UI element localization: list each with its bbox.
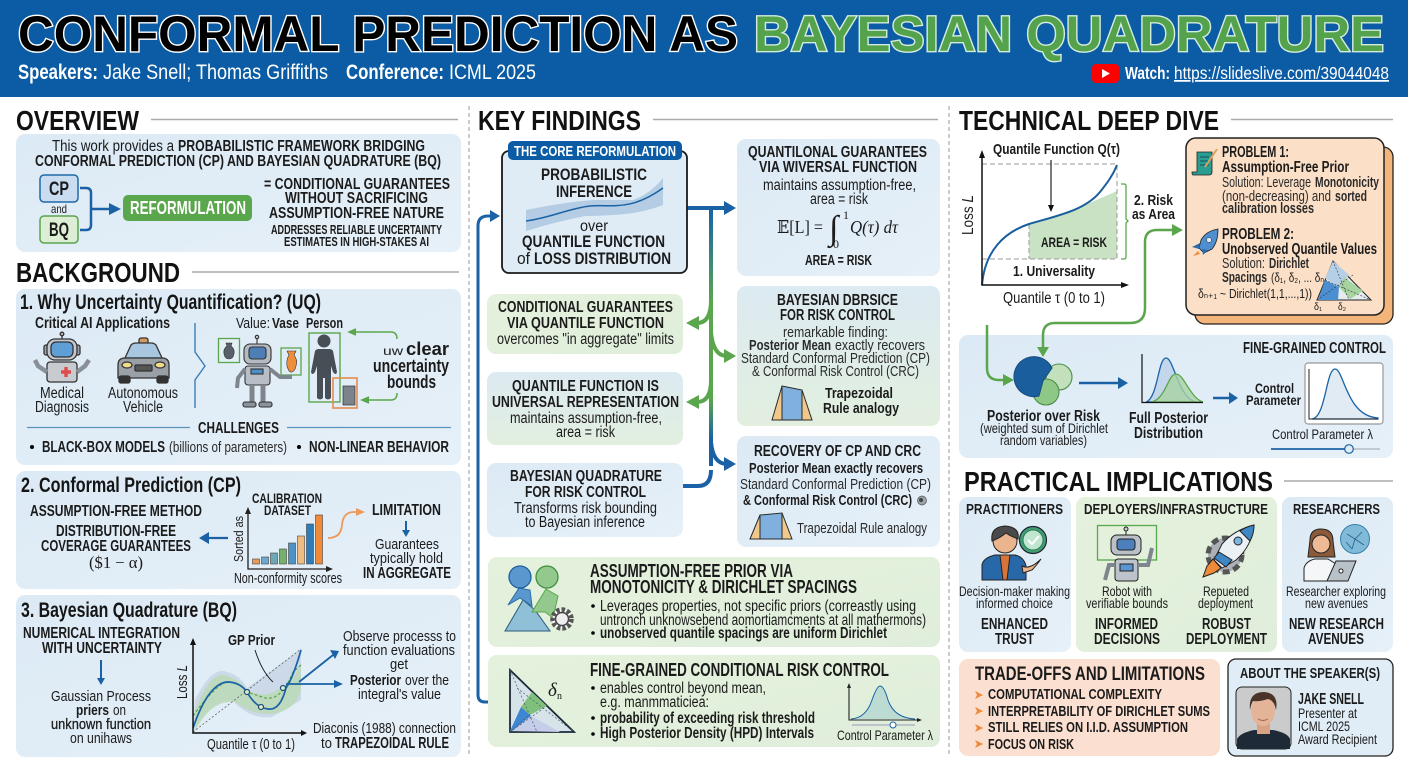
probabilistic inference text: PROBABILISTIC xyxy=(541,165,647,184)
card description: Posterior Mean xyxy=(749,338,831,354)
posterior over risk label: (weighted sum of Dirichlet xyxy=(980,420,1108,436)
card: researchers xyxy=(1282,497,1393,652)
card: bayesian quadrature for risk control: to Bayesian inference xyxy=(525,514,645,531)
application labels: Vehicle xyxy=(123,399,163,416)
arrow: to control parameter xyxy=(1213,392,1238,404)
problem 2 text: Spacings xyxy=(1222,270,1267,286)
card bullets xyxy=(591,598,926,642)
formula: expected loss integral: Q(τ) dτ xyxy=(850,217,899,238)
deployer captions: verifiable bounds xyxy=(1086,595,1168,611)
GP prior chart: Quantile τ (0 to 1) xyxy=(207,737,295,753)
problem 2 text xyxy=(1198,226,1377,301)
deployer captions: ROBUST xyxy=(1202,616,1251,633)
icon: detection robot scene xyxy=(218,333,357,408)
panel: conformal prediction xyxy=(16,471,461,589)
card: bayesian dbrsice xyxy=(737,286,940,426)
icon: dirichlet triangle xyxy=(510,670,574,732)
card: researchers: new avenues xyxy=(1305,595,1368,611)
overview intro text: This work provides a xyxy=(52,138,174,155)
coverage guarantees text: COVERAGE GUARANTEES xyxy=(41,538,191,555)
limitations list xyxy=(975,687,1210,753)
card heading xyxy=(748,144,927,176)
icon: posterior over risk pie xyxy=(1014,357,1072,405)
card heading: MONOTONICITY & DIRICHLET SPACINGS xyxy=(590,577,857,597)
card description xyxy=(740,460,931,509)
BQ box xyxy=(40,216,78,243)
full posterior label xyxy=(1129,410,1208,442)
card description: area = risk xyxy=(810,191,868,208)
result statement: ASSUMPTION-FREE NATURE xyxy=(269,205,444,222)
BQ box: BQ xyxy=(49,220,69,241)
numerical integration text: on unihaws xyxy=(70,730,132,747)
panel: about the speaker xyxy=(1228,659,1393,756)
card: conditional guarantees: VIA QUANTILE FUNCTION xyxy=(507,315,664,332)
speaker details: Presenter at xyxy=(1298,705,1357,721)
icon: robot with bounds xyxy=(1098,526,1156,581)
card description: exactly recovers xyxy=(835,338,925,354)
coverage guarantees text xyxy=(30,503,202,572)
chart: quantile function: AREA = RISK xyxy=(1041,234,1107,250)
trapezoidal rule label xyxy=(823,385,900,417)
card: recovery of CP and CRC xyxy=(737,436,940,547)
card bullets: untronch unknowsebend aomortiamcments at all mathermons) xyxy=(600,612,926,629)
speaker details: Award Recipient xyxy=(1298,731,1377,747)
formula: expected loss integral: 1 xyxy=(843,208,849,222)
numerical integration text: NUMERICAL INTEGRATION xyxy=(23,625,180,642)
icon: decision maker xyxy=(982,526,1046,580)
card description xyxy=(741,325,930,380)
problem 1 text xyxy=(1222,144,1379,217)
observation and posterior text: Diaconis (1988) connection xyxy=(313,720,456,737)
problem 1 text: sorted xyxy=(1335,189,1367,205)
limitations list: INTERPRETABILITY OF DIRICHLET SUMS xyxy=(988,704,1210,720)
challenges list: (billions of parameters) xyxy=(169,440,287,456)
probabilistic inference text xyxy=(541,165,647,201)
card: conditional guarantees: CONDITIONAL GUARANTEES xyxy=(498,299,673,316)
card: bayesian quadrature for risk control xyxy=(487,463,683,537)
header banner xyxy=(0,0,1408,97)
full posterior label: Full Posterior xyxy=(1129,410,1208,427)
and label: and xyxy=(51,202,67,216)
watch link: Watch: xyxy=(1125,63,1170,83)
calibration dataset chart xyxy=(231,490,342,587)
clear uncertainty bounds label: uw xyxy=(383,344,403,358)
speaker details: JAKE SNELL xyxy=(1298,691,1364,708)
calibration dataset chart: Sorted as xyxy=(231,516,246,562)
card: bayesian quadrature for risk control: BAYESIAN QUADRATURE xyxy=(510,468,662,485)
full posterior label: Distribution xyxy=(1134,425,1203,442)
chart: full posterior distribution xyxy=(1142,354,1203,402)
icon: dirichlet simplex: δ₁ xyxy=(1314,302,1323,313)
panel: trade-offs and limitations: TRADE-OFFS AND LIMITATIONS xyxy=(975,664,1205,685)
card: universal representation: area = risk xyxy=(556,424,615,441)
challenges list: BLACK-BOX MODELS xyxy=(42,439,165,456)
GP prior chart: Loss L xyxy=(175,665,191,699)
deployer captions: deployment xyxy=(1198,595,1253,611)
panel: why uncertainty quantification xyxy=(16,289,461,465)
card heading: FOR RISK CONTROL xyxy=(780,307,895,324)
deployer captions: Repueted xyxy=(1203,583,1249,599)
icon: scroll and quill xyxy=(1192,149,1217,175)
card description: & Conformal Risk Control (CRC) xyxy=(752,364,919,380)
card: practitioners: Decision-maker making xyxy=(959,583,1070,599)
result statement: WITHOUT SACRIFICING xyxy=(285,190,428,207)
observation and posterior text: over the xyxy=(405,672,449,689)
reformulation pill: REFORMULATION xyxy=(130,198,246,218)
numerical integration text: priers xyxy=(76,702,109,719)
panel heading: 1. Why Uncertainty Quantification? (UQ) xyxy=(20,291,321,314)
icon: dirichlet simplex: δ₂ xyxy=(1338,302,1346,313)
heading: practical implications: PRACTICAL IMPLICATIONS xyxy=(964,466,1273,497)
icon: rocket and gear xyxy=(1203,525,1254,577)
title xyxy=(18,6,1384,62)
card: deployers and infrastructure xyxy=(1076,497,1277,652)
icon: video play button xyxy=(1092,64,1119,83)
card description: maintains assumption-free, xyxy=(763,177,916,194)
reformulation pill xyxy=(123,195,252,221)
card heading xyxy=(590,561,857,597)
challenges list: NON-LINEAR BEHAVIOR xyxy=(309,439,449,456)
heading: key findings: KEY FINDINGS xyxy=(478,105,641,136)
problem 2 text: PROBLEM 2: xyxy=(1222,226,1294,243)
panel: overview xyxy=(16,134,461,252)
card bullets xyxy=(591,680,815,742)
clear uncertainty bounds label: bounds xyxy=(387,372,436,392)
formula: expected loss integral: 𝔼[L] = xyxy=(777,217,823,237)
chart: quantile function: Quantile Function Q(τ) xyxy=(993,141,1120,158)
quantile function text: over xyxy=(580,218,608,235)
area equals risk: AREA = RISK xyxy=(805,253,872,269)
control slider: Control Parameter λ xyxy=(1272,426,1373,442)
CP box: CP xyxy=(49,179,69,200)
icon: dirichlet triangle: n xyxy=(557,691,562,702)
value labels xyxy=(236,316,343,332)
formula: expected loss integral xyxy=(777,208,899,251)
card bullets: Leverages properties, not specific priors (correastly using xyxy=(600,598,916,615)
arrow: to coverage guarantees xyxy=(199,532,228,544)
result statement xyxy=(264,176,450,249)
speaker portrait xyxy=(1236,687,1291,749)
arrows: uncertainty bounds xyxy=(349,329,397,403)
application labels xyxy=(35,385,178,416)
card: practitioners: informed choice xyxy=(976,595,1053,611)
card description: remarkable finding: xyxy=(783,325,888,341)
trapezoidal rule label: Rule analogy xyxy=(823,400,900,417)
posterior over risk label: Posterior over Risk xyxy=(987,408,1100,425)
arrows: central flow network xyxy=(683,201,736,486)
arrows: to observations and posterior xyxy=(286,650,343,688)
card heading: RECOVERY OF CP AND CRC xyxy=(754,443,921,460)
card: quantilonal guarantees xyxy=(737,139,940,276)
overview intro text: PROBABILISTIC FRAMEWORK BRIDGING xyxy=(178,138,425,155)
numerical integration text: on xyxy=(113,702,126,719)
card: conditional guarantees xyxy=(487,294,683,354)
deployer captions xyxy=(1086,583,1267,648)
card: assumption-free prior xyxy=(488,557,940,647)
arrow: left feedback loop xyxy=(478,210,500,702)
panel heading: 3. Bayesian Quadrature (BQ) xyxy=(21,599,237,622)
value labels: Person xyxy=(306,316,343,332)
numerical integration text: WITH UNCERTAINTY xyxy=(42,640,163,657)
arrow: green link to problems and posterior xyxy=(987,224,1183,386)
panel: posterior flow xyxy=(959,335,1393,458)
card: universal representation xyxy=(487,372,683,445)
chart: quantile function: as Area xyxy=(1132,206,1176,223)
deployer captions: DEPLOYMENT xyxy=(1186,631,1267,648)
card: researchers: RESEARCHERS xyxy=(1293,501,1380,518)
icon: trapezoid xyxy=(750,513,792,539)
value labels: Vase xyxy=(272,316,299,332)
icon: small swirl xyxy=(918,496,926,505)
control parameter label xyxy=(1246,380,1301,408)
card: researchers: AVENUES xyxy=(1308,631,1364,648)
limitations list: STILL RELIES ON I.I.D. ASSUMPTION xyxy=(988,720,1188,736)
card description xyxy=(763,177,916,208)
problem 2 text: (δ₁, δ₂, ... δₙ, xyxy=(1271,270,1327,285)
numerical integration text: unknown function xyxy=(51,716,151,733)
clear uncertainty bounds label: uncertainty xyxy=(373,356,449,376)
chart: quantile function: 1. Universality xyxy=(1013,263,1096,280)
posterior over risk label xyxy=(980,408,1108,448)
card: bayesian quadrature for risk control: FOR RISK CONTROL xyxy=(525,484,646,501)
problem 1 text: Solution: Leverage xyxy=(1222,175,1311,191)
value labels: Value: xyxy=(236,316,270,332)
result statement: ADDRESSES RELIABLE UNCERTAINTY xyxy=(271,222,442,237)
challenges heading: CHALLENGES xyxy=(198,420,279,437)
speakers and conference: Conference: xyxy=(346,61,444,84)
deployer captions: INFORMED xyxy=(1095,616,1158,633)
panel: bayesian quadrature xyxy=(16,595,461,757)
observation and posterior text: Posterior xyxy=(350,672,401,689)
posterior over risk label: random variables) xyxy=(1000,432,1087,448)
icon: trapezoid xyxy=(772,386,812,420)
card: practitioners xyxy=(959,497,1071,652)
calibration dataset chart: DATASET xyxy=(264,502,311,518)
speaker details: ICML 2025 xyxy=(1298,718,1350,734)
formula: expected loss integral: 0 xyxy=(833,237,839,251)
icon: dirichlet simplex xyxy=(1314,261,1371,313)
card bullets: e.g. manmmaticiea: xyxy=(600,694,709,711)
card: universal representation: QUANTILE FUNCTION IS xyxy=(512,378,659,395)
card: universal representation: UNIVERSAL REPRESENTATION xyxy=(492,394,679,411)
arrow: merge to reformulation xyxy=(80,188,121,230)
icon: medical robot xyxy=(35,332,89,382)
core reformulation badge: THE CORE REFORMULATION xyxy=(514,143,676,160)
panel: problems xyxy=(1186,138,1393,324)
card description: & Conformal Risk Control (CRC) xyxy=(743,492,912,509)
overview intro text xyxy=(35,138,441,170)
observation and posterior text xyxy=(313,628,456,752)
CP box xyxy=(40,175,78,202)
panel: core reformulation xyxy=(502,141,687,273)
card heading xyxy=(777,292,898,324)
card: conditional guarantees: overcomes "in aggregate" limits xyxy=(497,331,674,348)
icon: autonomous car xyxy=(118,338,169,383)
calibration dataset chart: CALIBRATION xyxy=(252,490,322,506)
panel heading: 2. Conformal Prediction (CP) xyxy=(21,474,241,497)
challenges list xyxy=(30,439,449,456)
card: practitioners: TRUST xyxy=(995,631,1034,648)
card: practitioners: PRACTITIONERS xyxy=(966,501,1063,518)
arrow: to limitation xyxy=(328,508,365,538)
limitation text: Guarantees xyxy=(375,536,439,553)
arrow: to full posterior xyxy=(1079,377,1128,389)
card: bayesian quadrature for risk control: Transforms risk bounding xyxy=(514,500,657,517)
card: deployers and infrastructure: DEPLOYERS/INFRASTRUCTURE xyxy=(1084,501,1268,518)
quantile function text: QUANTILE FUNCTION xyxy=(522,232,665,251)
speakers and conference: Jake Snell; Thomas Griffiths xyxy=(103,61,328,84)
deployer captions: Robot with xyxy=(1102,583,1152,599)
card: fine-grained conditional risk control xyxy=(488,655,940,747)
card heading: VIA WIVERSAL FUNCTION xyxy=(759,159,917,176)
icon: researcher with laptop xyxy=(1304,524,1370,581)
quantile curve band xyxy=(526,178,663,231)
icon: overlapping figures and gear xyxy=(505,566,572,631)
application labels: Autonomous xyxy=(108,385,178,402)
speaker details xyxy=(1298,691,1377,747)
panel: trade-offs and limitations xyxy=(959,659,1220,756)
calibration dataset chart: Non-conformity scores xyxy=(234,571,342,587)
card heading: BAYESIAN DBRSICE xyxy=(777,292,898,309)
trapezoidal rule label: Trapezoidal Rule analogy xyxy=(797,521,928,537)
observation and posterior text: integral's value xyxy=(358,686,441,703)
control parameter mini chart: Control Parameter λ xyxy=(837,727,933,743)
observation and posterior text: to xyxy=(321,735,332,752)
chart: quantile function xyxy=(960,141,1176,307)
card: practitioners: ENHANCED xyxy=(981,616,1048,633)
card bullets: unobserved quantile spacings are uniform Dirichlet xyxy=(600,625,887,642)
application labels: Diagnosis xyxy=(35,399,89,416)
problem 2 text: δₙ₊₁ ~ Dirichlet(1,1,...,1)) xyxy=(1198,286,1312,301)
GP prior chart: GP Prior xyxy=(228,632,275,649)
card: universal representation: maintains assumption-free, xyxy=(510,410,662,427)
speakers and conference: ICML 2025 xyxy=(449,61,536,84)
speakers and conference: Speakers: xyxy=(18,61,98,84)
card description: Standard Conformal Prediction (CP) xyxy=(740,477,931,493)
probabilistic inference text: INFERENCE xyxy=(556,182,632,201)
problem 2 text: Dirichlet xyxy=(1269,256,1309,272)
control parameter label: Parameter xyxy=(1246,392,1301,408)
card heading: QUANTILONAL GUARANTEES xyxy=(748,144,927,161)
icon: rocket xyxy=(1192,229,1218,256)
numerical integration text: Gaussian Process xyxy=(51,688,151,705)
application labels: Medical xyxy=(40,385,84,402)
speakers and conference xyxy=(18,61,536,84)
limitation text: LIMITATION xyxy=(372,502,441,519)
formula: expected loss integral: ∫ xyxy=(827,210,841,249)
result statement: ESTIMATES IN HIGH-STAKES AI xyxy=(284,234,429,249)
coverage guarantees text: DISTRIBUTION-FREE xyxy=(56,523,176,540)
observation and posterior text: get xyxy=(390,656,409,673)
problem 1 text: PROBLEM 1: xyxy=(1222,144,1289,161)
problem 1 text: Assumption-Free Prior xyxy=(1222,159,1349,176)
clear uncertainty bounds label: clear xyxy=(406,339,449,359)
critical AI applications label: Critical AI Applications xyxy=(35,315,170,332)
chart: quantile function: 2. Risk xyxy=(1134,192,1174,209)
heading: overview: OVERVIEW xyxy=(16,105,139,136)
chart: control parameter distribution xyxy=(1305,363,1383,424)
trapezoidal rule label: Trapezoidal xyxy=(825,385,893,402)
observation and posterior text: Observe processs to xyxy=(343,628,456,645)
GP prior chart xyxy=(175,632,307,753)
coverage guarantees text: ASSUMPTION-FREE METHOD xyxy=(30,503,202,520)
control parameter mini chart xyxy=(837,683,933,743)
card bullets: enables control beyond mean, xyxy=(600,680,766,697)
limitations list: COMPUTATIONAL COMPLEXITY xyxy=(988,687,1162,703)
card bullets: High Posterior Density (HPD) Intervals xyxy=(600,725,814,742)
card bullets: probability of exceeding risk threshold xyxy=(600,710,815,727)
clear uncertainty bounds label xyxy=(373,339,449,392)
problem 1 text: (non-decreasing) and xyxy=(1222,189,1331,205)
heading: background: BACKGROUND xyxy=(16,257,180,288)
heading: technical deep dive: TECHNICAL DEEP DIVE xyxy=(959,105,1219,136)
deployer captions: DECISIONS xyxy=(1094,631,1160,648)
overview intro text: CONFORMAL PREDICTION (CP) AND BAYESIAN QUADRATURE (BQ) xyxy=(35,153,441,170)
quantile function text: of xyxy=(517,249,530,268)
coverage guarantees text: ($1 − α) xyxy=(89,553,143,572)
numerical integration text xyxy=(23,625,180,747)
control slider xyxy=(1271,426,1380,453)
card heading: ASSUMPTION-FREE PRIOR VIA xyxy=(590,561,793,581)
chart: quantile function: Quantile τ (0 to 1) xyxy=(1003,290,1105,307)
problem 2 text: Solution: xyxy=(1222,256,1265,272)
result statement: = CONDITIONAL GUARANTEES xyxy=(264,176,450,193)
problem 1 text: Monotonicity xyxy=(1315,175,1379,191)
limitation text xyxy=(363,502,451,582)
chart: quantile function: Loss L xyxy=(960,195,977,235)
card heading: FINE-GRAINED CONDITIONAL RISK CONTROL xyxy=(590,660,889,680)
control parameter label: Control xyxy=(1255,380,1294,396)
title: BAYESIAN QUADRATURE xyxy=(754,6,1384,62)
icon: dirichlet triangle: δ xyxy=(548,680,558,701)
card description: Standard Conformal Prediction (CP) xyxy=(741,351,930,367)
quantile function text: LOSS DISTRIBUTION xyxy=(534,249,671,268)
observation and posterior text: TRAPEZOIDAL RULE xyxy=(335,735,449,752)
limitation text: typically hold xyxy=(370,550,443,567)
quantile function text xyxy=(517,218,671,268)
limitations list: FOCUS ON RISK xyxy=(988,737,1074,753)
title: CONFORMAL PREDICTION AS xyxy=(18,6,738,62)
observation and posterior text: function evaluations xyxy=(343,642,455,659)
problem 1 text: calibration losses xyxy=(1222,201,1314,217)
limitation text: IN AGGREGATE xyxy=(363,565,451,582)
card description: Posterior Mean exactly recovers xyxy=(749,460,923,477)
